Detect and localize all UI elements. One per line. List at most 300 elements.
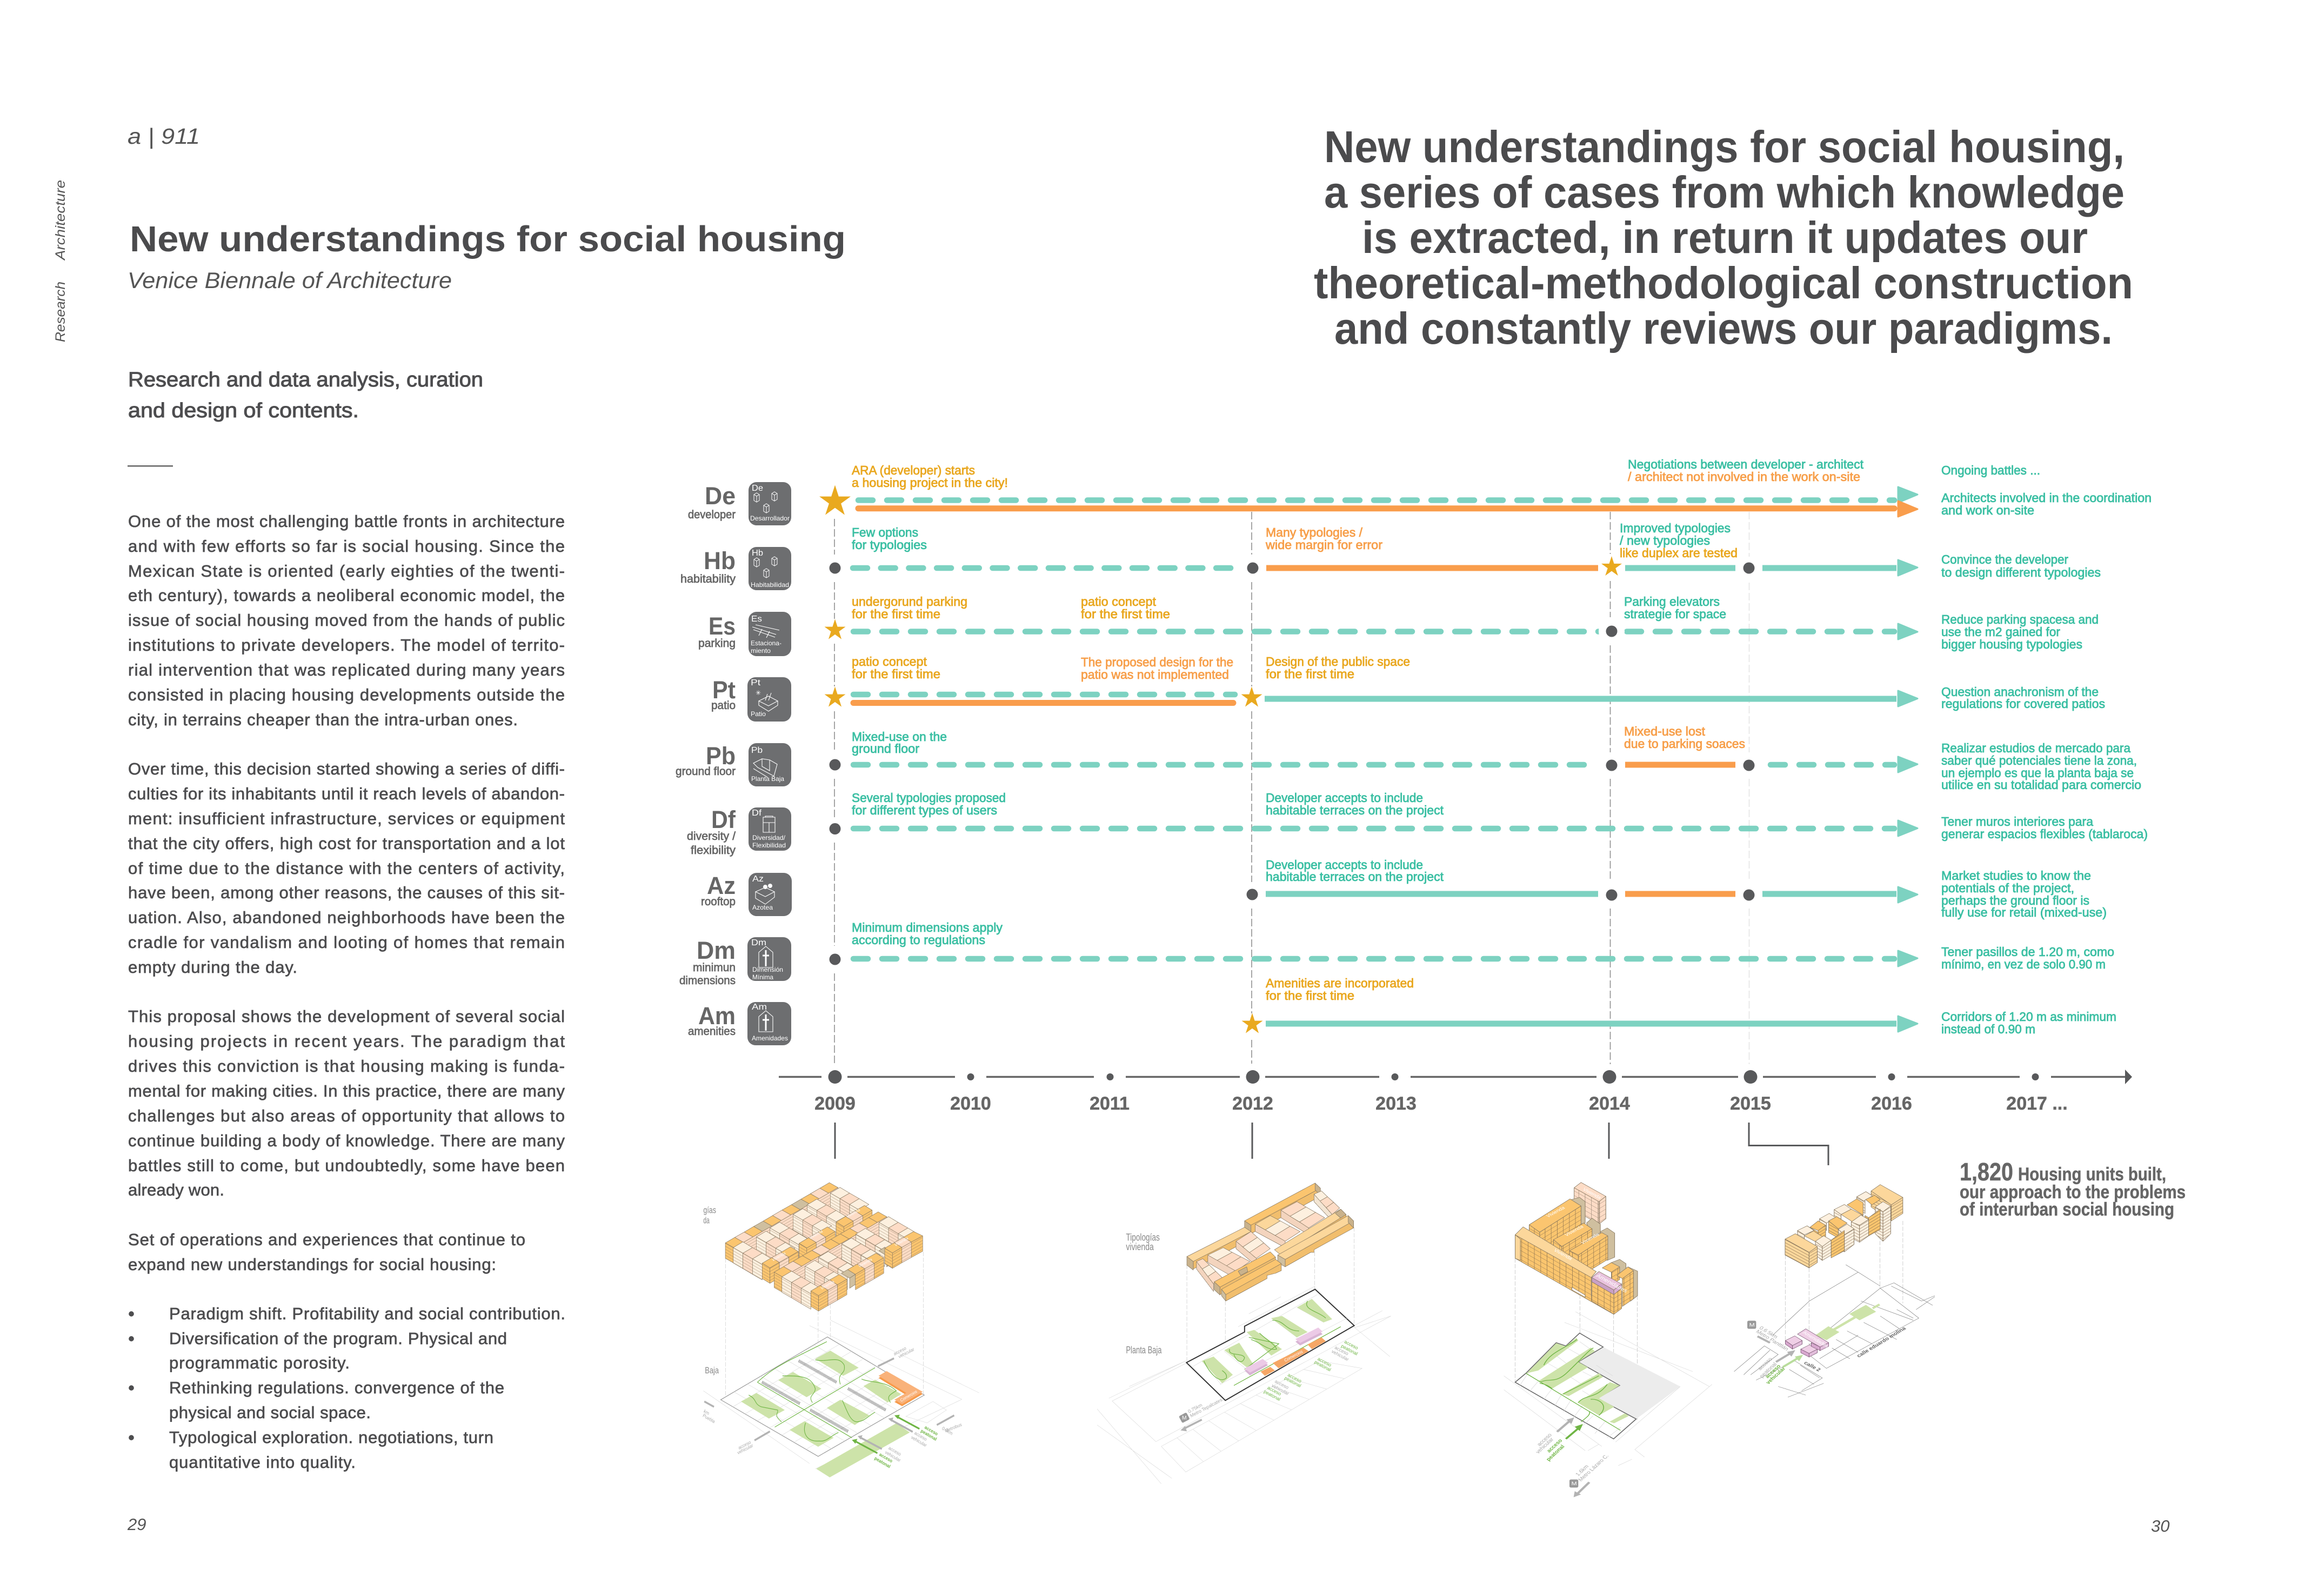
row code and name bbox=[676, 742, 736, 778]
captions: vivienda bbox=[1126, 1241, 1154, 1252]
row: Hb habitability bbox=[680, 521, 2101, 590]
notes: for different types of users bbox=[852, 803, 997, 817]
body text: ment: insufficient infrastructure, services or equipment bbox=[128, 809, 565, 828]
marker bbox=[829, 823, 841, 834]
street and access labels: calle 2 bbox=[1802, 1360, 1822, 1373]
bullet list: Typological exploration. negotiations, turn bbox=[169, 1428, 493, 1447]
bullet list: programmatic porosity. bbox=[169, 1353, 350, 1372]
icon: parking bbox=[749, 612, 791, 656]
icon: patio bbox=[747, 677, 791, 722]
right page statement title: and constantly reviews our paradigms. bbox=[1334, 303, 2113, 353]
icon: diversity: Flexibilidad bbox=[752, 842, 786, 849]
note: negotiations: / architect not involved in the work on-site bbox=[1628, 470, 1860, 484]
metro icon bbox=[1747, 1321, 1756, 1329]
outcome note bbox=[1941, 814, 2148, 841]
notes: patio concept bbox=[852, 655, 927, 669]
body text: challenges but also areas of opportunity that allows to bbox=[128, 1106, 565, 1125]
row: Pb ground floor bbox=[676, 724, 2141, 792]
line segments bbox=[1266, 891, 1896, 897]
row code and name bbox=[688, 1002, 736, 1038]
year labels: 2011 bbox=[1090, 1093, 1130, 1114]
metro icon bbox=[1569, 1479, 1578, 1487]
access labels: vehicular bbox=[884, 1450, 901, 1463]
row: Es parking bbox=[698, 595, 2099, 656]
year labels: 2015 bbox=[1730, 1093, 1771, 1114]
body text: cradle for vandalism and looting of homes that remain bbox=[128, 933, 565, 952]
row: De developer bbox=[688, 457, 2152, 525]
arrow bbox=[1898, 887, 1918, 903]
icon: developer: Desarrollador bbox=[750, 515, 790, 522]
housing blocks bbox=[1785, 1185, 1903, 1268]
access labels: acceso bbox=[888, 1445, 902, 1457]
row code and name bbox=[698, 612, 736, 650]
access labels: vehicular bbox=[1534, 1437, 1555, 1455]
body text: institutions to private developers. The model of territo- bbox=[128, 636, 565, 655]
outcome note: un ejemplo es que la planta baja se bbox=[1941, 766, 2134, 780]
subtitle: Venice Biennale of Architecture bbox=[128, 268, 452, 293]
markers bbox=[825, 686, 1262, 707]
row: Pt patio bbox=[711, 655, 2105, 722]
access labels: peatonal bbox=[920, 1428, 938, 1442]
row code and name: diversity / bbox=[687, 830, 736, 843]
line segments bbox=[853, 762, 1894, 767]
body text: eth century), towards a neoliberal economic model, the bbox=[128, 586, 565, 605]
outcome note: Question anachronism of the bbox=[1941, 685, 2099, 699]
access labels: Metro Lázaro C. bbox=[1578, 1453, 1611, 1483]
notes: / new typologies bbox=[1620, 533, 1710, 547]
icon: amenities: Am bbox=[752, 1003, 767, 1012]
housing blocks: Vivienda bbox=[1564, 1224, 1585, 1237]
row code and name: dimensions bbox=[679, 974, 736, 987]
icon: start star bbox=[819, 485, 851, 515]
summary: 1,820 housing units: our approach to the problems bbox=[1960, 1182, 2186, 1203]
markers bbox=[829, 556, 1754, 576]
notes: for the first time bbox=[852, 607, 940, 621]
body text: of time due to the distance with the centers of activity, bbox=[128, 859, 565, 878]
housing blocks: Vivienda bbox=[845, 1207, 861, 1219]
summary: 1,820 housing units: of interurban social housing bbox=[1960, 1199, 2174, 1220]
note: habitable terraces on the project bbox=[1266, 870, 1444, 884]
icon: minimum dimensions bbox=[747, 937, 791, 981]
row code and name: Am bbox=[698, 1002, 736, 1030]
outcome note: Tener pasillos de 1.20 m, como bbox=[1941, 945, 2114, 959]
year labels: 2012 bbox=[1232, 1093, 1273, 1114]
outcome note: utilice en su totalidad para comercio bbox=[1941, 778, 2141, 792]
access labels: 1.6km bbox=[1574, 1464, 1591, 1477]
notes: due to parking soaces bbox=[1624, 737, 1745, 751]
housing blocks: Vivienda bbox=[771, 1250, 787, 1263]
markers bbox=[1246, 889, 1754, 900]
arrow bbox=[1898, 560, 1918, 576]
housing blocks: Amenidades bbox=[1595, 1273, 1629, 1294]
ground plan bbox=[702, 1320, 979, 1477]
icon: minimum dimensions: Mínima bbox=[752, 973, 773, 981]
housing blocks bbox=[725, 1183, 923, 1311]
outcome notes: and work on-site bbox=[1941, 503, 2034, 517]
housing blocks: Vivienda bbox=[1582, 1187, 1603, 1200]
right page statement title: New understandings for social housing, bbox=[1324, 122, 2125, 172]
row: Df diversity flexibility bbox=[687, 791, 2148, 857]
vertical section label bbox=[53, 180, 68, 342]
marker bbox=[1242, 1013, 1262, 1033]
housing blocks: Vivienda bbox=[1553, 1248, 1574, 1261]
running head: a | 911: a | 911 bbox=[128, 124, 200, 149]
site outline and plan bbox=[1179, 1289, 1359, 1431]
notes: Design of the public space bbox=[1266, 655, 1410, 669]
row code and name bbox=[679, 937, 736, 987]
row code and name: amenities bbox=[688, 1025, 736, 1038]
notes: patio concept bbox=[1081, 595, 1156, 609]
row code and name: habitability bbox=[680, 573, 736, 585]
access labels bbox=[1534, 1432, 1611, 1483]
body text: Over time, this decision started showing a series of diffi- bbox=[128, 759, 565, 778]
notes: patio was not implemented bbox=[1081, 667, 1229, 682]
captions bbox=[1126, 1232, 1162, 1355]
timeline segments bbox=[853, 565, 1896, 571]
notes bbox=[852, 791, 1444, 817]
metro icon: M bbox=[1572, 1481, 1577, 1487]
icon: diversity bbox=[749, 807, 791, 851]
access labels: vehicular bbox=[910, 1435, 927, 1448]
street and access labels: Metro Panttlán bbox=[1754, 1329, 1789, 1352]
housing blocks: Vivienda bbox=[894, 1236, 909, 1247]
notes bbox=[852, 521, 1738, 560]
note: ARA starts: ARA (developer) starts bbox=[852, 463, 975, 477]
icon: ground floor: Planta Baja bbox=[751, 775, 784, 783]
icon: patio: ✳ bbox=[756, 689, 761, 697]
bullet list bbox=[129, 1304, 565, 1472]
vertical section label: Research bbox=[53, 282, 68, 342]
bullet list: Rethinking regulations. convergence of the bbox=[169, 1378, 504, 1397]
year labels: 2013 bbox=[1375, 1093, 1417, 1114]
body text: mental for making cities. In this practice, there are many bbox=[128, 1081, 565, 1100]
access labels: peatonal bbox=[1313, 1359, 1332, 1372]
caption fragments: Baja bbox=[705, 1366, 719, 1375]
outcome notes bbox=[1941, 463, 2152, 517]
note: ARA starts: a housing project in the city! bbox=[852, 476, 1008, 490]
icon: minimum dimensions: Dm bbox=[751, 938, 766, 947]
outcome note: generar espacios flexibles (tablaroca) bbox=[1941, 827, 2148, 841]
icon: rooftop: Azotea bbox=[752, 904, 773, 911]
notes bbox=[852, 595, 1726, 621]
bullet list: Paradigm shift. Profitability and social contribution. bbox=[169, 1304, 565, 1323]
street and access labels: 0.6 5km bbox=[1758, 1325, 1779, 1340]
access labels: acceso bbox=[878, 1452, 893, 1464]
notes: for the first time bbox=[852, 667, 940, 681]
outcome note: Reduce parking spacesa and bbox=[1941, 612, 2099, 626]
page number 30: 30 bbox=[2151, 1517, 2169, 1535]
left page title: New understandings for social housing bbox=[130, 219, 846, 259]
body text: that the city offers, high cost for transportation and a lot bbox=[128, 834, 565, 853]
access labels: km bbox=[703, 1408, 710, 1416]
row code and name: Az bbox=[707, 872, 736, 899]
note bbox=[1266, 858, 1444, 884]
access labels: Metro Tepalcates bbox=[1189, 1397, 1224, 1418]
body text: culties for its inhabitants until it reach levels of abandon- bbox=[128, 784, 565, 803]
access labels: vehicular bbox=[898, 1347, 915, 1359]
row code and name bbox=[701, 872, 736, 908]
amenity blocks bbox=[1245, 1327, 1322, 1375]
notes: Mixed-use on the bbox=[852, 730, 947, 744]
row: Am amenities bbox=[688, 976, 2116, 1045]
year axis bbox=[779, 1070, 2132, 1114]
notes: habitable terraces on the project bbox=[1266, 803, 1444, 817]
outcome note: Tener muros interiores para bbox=[1941, 814, 2094, 829]
outcome note bbox=[1941, 612, 2099, 651]
right page statement title bbox=[1314, 122, 2133, 353]
captions: Planta Baja bbox=[1126, 1345, 1162, 1355]
access labels bbox=[702, 1346, 963, 1469]
commercial block bbox=[879, 1371, 923, 1406]
outcome note bbox=[1941, 945, 2114, 971]
access arrows bbox=[1758, 1336, 1803, 1367]
arrow bbox=[1898, 757, 1918, 772]
context lines bbox=[1097, 1286, 1391, 1484]
arrow bbox=[1898, 820, 1918, 836]
arrow bbox=[1898, 1016, 1918, 1032]
caption fragments bbox=[703, 1206, 719, 1375]
outcome note: saber qué potenciales tiene la zona, bbox=[1941, 753, 2137, 767]
notes bbox=[852, 724, 1745, 756]
body text: issue of social housing moved from the hands of public bbox=[128, 611, 565, 630]
dashed line bbox=[853, 826, 1894, 831]
row code and name: minimun bbox=[693, 961, 736, 974]
access labels: acceso bbox=[924, 1425, 939, 1437]
access labels: peatonal bbox=[1340, 1343, 1359, 1357]
captions: Tipologías bbox=[1126, 1232, 1160, 1243]
projection lines bbox=[1515, 1258, 1637, 1439]
notes: wide margin for error bbox=[1265, 538, 1382, 552]
year labels: 2009 bbox=[814, 1093, 856, 1114]
outcome note bbox=[1941, 685, 2105, 711]
body text: expand new understandings for social housing: bbox=[128, 1255, 496, 1274]
icon: patio: Pt bbox=[751, 678, 761, 687]
notes: undergorund parking bbox=[852, 595, 967, 609]
projection lines bbox=[1785, 1221, 1903, 1345]
marker bbox=[829, 953, 841, 965]
access arrows bbox=[1557, 1418, 1589, 1497]
access labels: acceso bbox=[893, 1346, 907, 1357]
page number 29: 29 bbox=[127, 1515, 146, 1534]
year labels: 2014 bbox=[1589, 1093, 1630, 1114]
access labels: acceso bbox=[738, 1440, 752, 1451]
bullet list: Diversification of the program. Physical and bbox=[169, 1329, 507, 1348]
housing blocks: Vivienda bbox=[808, 1228, 824, 1240]
notes: Many typologies / bbox=[1266, 525, 1362, 539]
bullet list: physical and social space. bbox=[169, 1403, 371, 1422]
access labels: peatonal bbox=[873, 1455, 891, 1469]
credit statement bbox=[128, 369, 483, 422]
year labels: 2017 ... bbox=[2006, 1093, 2068, 1114]
icon: developer: De bbox=[752, 484, 763, 493]
notes: Several typologies proposed bbox=[852, 791, 1006, 805]
access labels: Metrobus bbox=[944, 1422, 963, 1433]
outcome note: mínimo, en vez de solo 0.90 m bbox=[1941, 957, 2106, 971]
row code and name bbox=[680, 547, 736, 585]
commercial blocks: Comercios bbox=[1284, 1349, 1304, 1363]
icon: patio: Patio bbox=[751, 710, 766, 718]
notes: for the first time bbox=[1266, 667, 1354, 681]
summary: 1,820 housing units bbox=[1960, 1158, 2186, 1220]
note: ARA starts bbox=[852, 463, 1008, 490]
drawing: 2014 axonometric bbox=[1504, 1183, 1712, 1497]
icon: rooftop bbox=[749, 873, 792, 916]
icon: habitability: Habitabilidad bbox=[751, 581, 789, 589]
row: Az rooftop bbox=[701, 858, 2107, 919]
notes: for the first time bbox=[1081, 607, 1170, 621]
outcome note bbox=[1941, 869, 2107, 919]
outcome note bbox=[1941, 741, 2141, 792]
row code and name: ground floor bbox=[676, 765, 736, 778]
markers bbox=[825, 618, 1625, 644]
body text: uation. Also, abandoned neighborhoods have been the bbox=[128, 908, 565, 927]
amenity blocks bbox=[1785, 1329, 1830, 1357]
notes: Mixed-use lost bbox=[1624, 724, 1705, 738]
row code and name: Pt bbox=[712, 676, 736, 704]
right page statement title: theoretical-methodological construction bbox=[1314, 258, 2133, 308]
notes: for typologies bbox=[852, 538, 927, 552]
year labels bbox=[814, 1093, 2068, 1114]
row: Dm minimum dimensions bbox=[679, 920, 2114, 987]
ground plan bbox=[1515, 1333, 1680, 1497]
solid line bbox=[1266, 1020, 1896, 1027]
outcome notes: Ongoing battles ... bbox=[1941, 463, 2040, 477]
row code and name: Hb bbox=[704, 547, 736, 575]
access labels: 0.9km bbox=[941, 1426, 953, 1436]
vertical section label: Architecture bbox=[53, 180, 68, 261]
access labels: acceso bbox=[913, 1431, 928, 1442]
outcome note: instead of 0.90 m bbox=[1941, 1022, 2035, 1036]
notes: Improved typologies bbox=[1620, 521, 1731, 535]
icon: habitability: Hb bbox=[752, 549, 763, 558]
body text: battles still to come, but undoubtedly, some have been bbox=[128, 1156, 565, 1175]
icon: amenities bbox=[747, 1002, 791, 1045]
notes: Few options bbox=[852, 525, 918, 539]
outcome note: Convince the developer bbox=[1941, 552, 2068, 566]
icon: diversity: Diversidad/ bbox=[752, 834, 786, 842]
notes bbox=[852, 655, 1410, 682]
caption fragments: da bbox=[703, 1216, 710, 1226]
access labels: acceso bbox=[1317, 1356, 1332, 1368]
metro icon: M bbox=[1749, 1322, 1755, 1328]
access labels: vehicular bbox=[1271, 1383, 1290, 1397]
access labels: acceso bbox=[1536, 1432, 1554, 1447]
caption fragments: gías bbox=[703, 1206, 716, 1216]
commercial block: Comercios bbox=[899, 1389, 918, 1403]
row code and name: Dm bbox=[697, 937, 736, 964]
street and access labels bbox=[1754, 1325, 1908, 1385]
arrow bbox=[1898, 691, 1918, 706]
outcome note: regulations for covered patios bbox=[1941, 697, 2105, 711]
street and access labels: peatonal bbox=[1759, 1362, 1779, 1379]
note: for the first time bbox=[1266, 989, 1354, 1003]
drawing: 2012 axonometric bbox=[1097, 1183, 1391, 1484]
access arrows bbox=[704, 1358, 954, 1453]
row code and name: flexibility bbox=[691, 844, 736, 857]
short rule bbox=[128, 465, 173, 467]
outcome note: bigger housing typologies bbox=[1941, 637, 2082, 651]
body text: have been, among other reasons, the causes of this sit- bbox=[128, 883, 565, 902]
housing blocks bbox=[1515, 1183, 1638, 1314]
access labels: acceso bbox=[1546, 1438, 1564, 1454]
arrow bbox=[1898, 951, 1918, 966]
note: Developer accepts to include bbox=[1266, 858, 1423, 872]
housing blocks: Vivienda bbox=[1545, 1205, 1566, 1218]
icon: parking: miento bbox=[751, 647, 771, 655]
street and access labels: acceso bbox=[1764, 1364, 1782, 1379]
access labels: peatonal bbox=[1284, 1375, 1302, 1388]
access labels: acceso bbox=[1266, 1385, 1282, 1397]
outcome notes: Architects involved in the coordination bbox=[1941, 491, 2152, 505]
icon: ground floor bbox=[749, 743, 791, 786]
access labels bbox=[1187, 1339, 1359, 1418]
notes: ground floor bbox=[852, 742, 919, 756]
row code and name: Df bbox=[711, 806, 736, 833]
outcome note: potentials of the project, bbox=[1941, 881, 2074, 895]
outcome note: Corridors of 1.20 m as minimum bbox=[1941, 1010, 2116, 1024]
icon: ground floor: Pb bbox=[751, 746, 763, 755]
right page statement title: is extracted, in return it updates our bbox=[1362, 212, 2088, 263]
dashed teal line and orange line bbox=[858, 500, 1894, 509]
body text: rial intervention that was replicated during many years bbox=[128, 660, 565, 679]
notes: Parking elevators bbox=[1624, 595, 1720, 609]
row code and name: parking bbox=[698, 637, 736, 650]
access labels: peatonal bbox=[1263, 1388, 1281, 1402]
outcome note: use the m2 gained for bbox=[1941, 625, 2060, 639]
body text: Set of operations and experiences that continue to bbox=[128, 1230, 525, 1249]
markers bbox=[829, 759, 1754, 771]
icon: amenities: Amenidades bbox=[752, 1034, 788, 1042]
housing blocks: Vivienda bbox=[858, 1257, 873, 1268]
row code and name bbox=[687, 806, 736, 857]
note: according to regulations bbox=[852, 933, 985, 947]
summary: 1,820 housing units: Housing units built, bbox=[2018, 1164, 2166, 1185]
dashed line bbox=[853, 956, 1894, 961]
right page statement title: a series of cases from which knowledge bbox=[1324, 167, 2125, 217]
housing blocks bbox=[1187, 1183, 1353, 1301]
icon: developer bbox=[749, 482, 791, 525]
bullet list: quantitative into quality. bbox=[169, 1453, 356, 1472]
body text: drives this conviction is that housing making is funda- bbox=[128, 1057, 565, 1076]
notes: Developer accepts to include bbox=[1266, 791, 1423, 805]
dashed line bbox=[853, 629, 1894, 635]
access labels: acceso bbox=[1344, 1339, 1359, 1351]
arrows bbox=[1898, 487, 1918, 517]
icon: habitability bbox=[749, 547, 791, 590]
street and access labels: calle eduardo molina bbox=[1856, 1326, 1908, 1359]
body text: Mexican State is oriented (early eighties of the twenti- bbox=[128, 562, 565, 580]
projection lines bbox=[1187, 1227, 1354, 1400]
access labels: acceso bbox=[1274, 1378, 1290, 1390]
context lines bbox=[1504, 1312, 1712, 1466]
street and access labels: vehicular bbox=[1765, 1366, 1787, 1385]
access labels: 0.75km bbox=[1187, 1402, 1203, 1414]
outcome note bbox=[1941, 552, 2101, 579]
body text: city, in terrains cheaper than the intra-urban ones. bbox=[128, 710, 518, 729]
icon: minimum dimensions: Dimensión bbox=[752, 966, 783, 973]
access labels: peatonal bbox=[1545, 1444, 1566, 1462]
note: Minimum dimensions apply bbox=[852, 920, 1003, 934]
outcome note: perhaps the ground floor is bbox=[1941, 893, 2089, 907]
access labels: acceso bbox=[1287, 1372, 1302, 1384]
icon: parking: Es bbox=[751, 615, 762, 624]
outcome note bbox=[1941, 1010, 2116, 1036]
projection lines bbox=[725, 1252, 923, 1456]
line segments bbox=[853, 695, 1896, 703]
outcome note: fully use for retail (mixed-use) bbox=[1941, 905, 2107, 919]
credit statement: and design of contents. bbox=[128, 399, 359, 422]
body text: already won. bbox=[128, 1180, 224, 1199]
